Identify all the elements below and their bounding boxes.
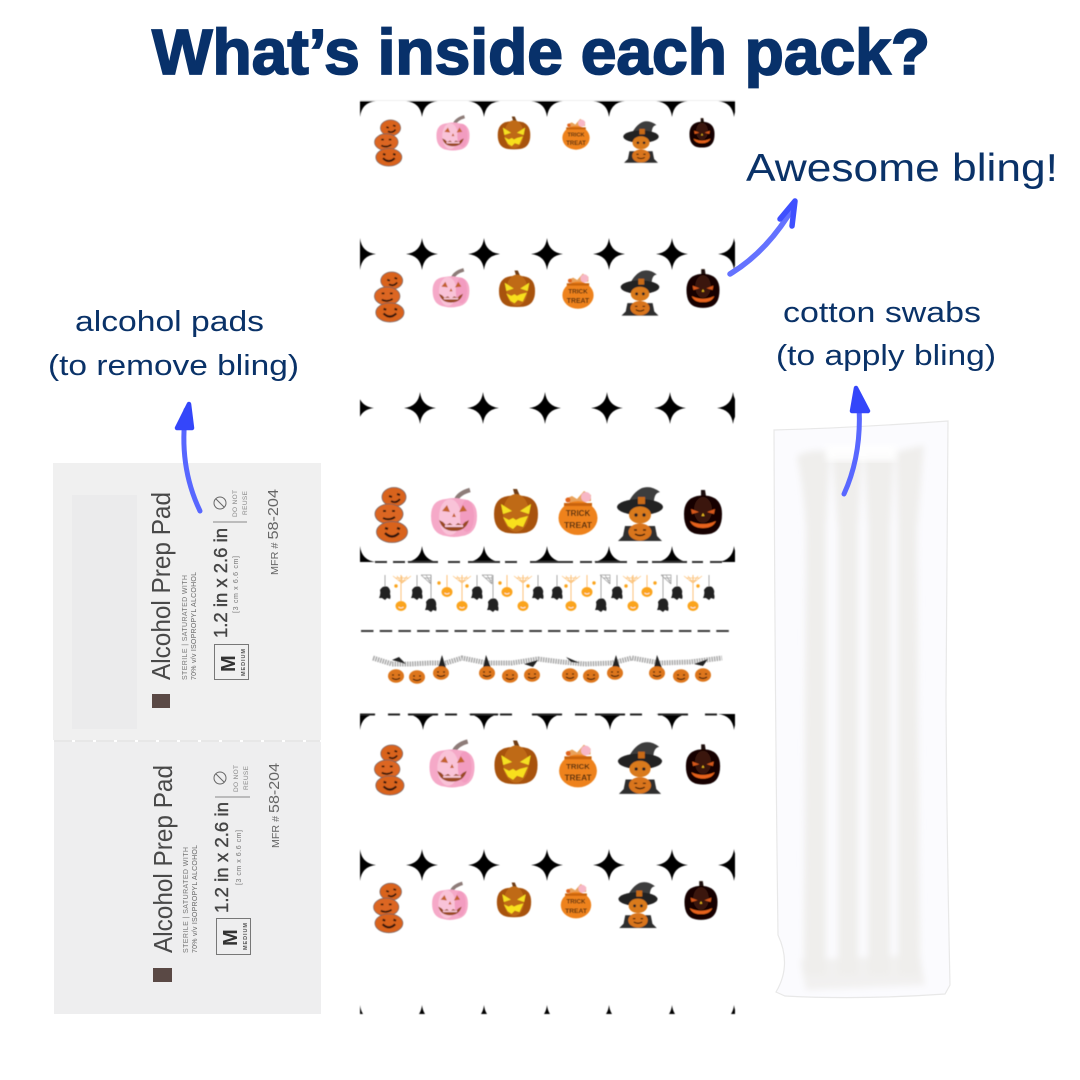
pad 1 label: M [218, 655, 240, 672]
label: cotton swabs: (to apply bling) [776, 340, 996, 372]
panel: bling sticker sheet [359, 100, 736, 1015]
icon row 1 [375, 116, 715, 166]
pad 1 label: STERILE | SATURATED WITH [182, 575, 189, 680]
pad 2 label: DO NOT [233, 765, 240, 792]
ghost and pumpkin garland [379, 575, 714, 612]
pad 2 label [148, 763, 283, 982]
star row: upper cut with dashes [359, 712, 736, 730]
pad 2 label: STERILE | SATURATED WITH [183, 847, 190, 953]
pad 2 label: MFR # 58-204 [266, 763, 283, 848]
pad 2 label: MEDIUM [243, 923, 249, 950]
pad 1 label: 1.2 in x 2.6 in [210, 528, 231, 638]
pad 2 label: Alcohol Prep Pad [148, 765, 178, 953]
arrow: to alcohol pads [177, 404, 200, 511]
icon row 4 [374, 740, 720, 795]
label: awesome bling: Awesome bling! [746, 147, 1058, 190]
pad 1 label: [3 cm x 6.6 cm] [233, 556, 240, 613]
pad 1 label: MEDIUM [241, 649, 247, 676]
label: cotton swabs: cotton swabs [783, 297, 981, 329]
pad 1 label: MFR # 58-204 [265, 489, 282, 575]
icon row 5 [374, 881, 718, 933]
dashed divider [361, 630, 735, 632]
pumpkin bunting [373, 655, 722, 684]
label: alcohol pads [48, 306, 299, 382]
pad 1 label: REUSE [242, 490, 249, 515]
pad 1 label: Alcohol Prep Pad [146, 492, 176, 680]
title: What’s inside each pack? [152, 16, 930, 88]
pad 2 label: [3 cm x 6.6 cm] [236, 830, 243, 885]
star row 3 [342, 392, 749, 424]
pad 2 label: 70% v/v ISOPROPYL ALCOHOL [192, 845, 199, 953]
arrow: to awesome bling [730, 201, 795, 274]
pad 2 label: M [220, 929, 242, 946]
pad 2 label: REUSE [243, 765, 250, 790]
star row: bottom tips [359, 1005, 736, 1015]
label: cotton swabs [776, 297, 996, 372]
icon row 3 [375, 487, 722, 542]
star row 6 [344, 849, 750, 881]
pad 1 label: DO NOT [232, 490, 239, 517]
arrow: to cotton swabs [844, 388, 868, 494]
panel: alcohol prep pads [53, 463, 321, 1014]
pad 1 label: 70% v/v ISOPROPYL ALCOHOL [191, 572, 198, 680]
star row: lower cut with dashes [359, 546, 736, 564]
panel: cotton swab pack [774, 421, 950, 998]
pad 1 label [146, 489, 282, 708]
star row: top cut [359, 100, 736, 117]
label: alcohol pads: (to remove bling) [48, 350, 299, 382]
icon row 2 [374, 269, 720, 322]
pad 2 label: 1.2 in x 2.6 in [211, 802, 232, 913]
label: alcohol pads: alcohol pads [75, 306, 264, 338]
star row 2 [344, 238, 750, 270]
